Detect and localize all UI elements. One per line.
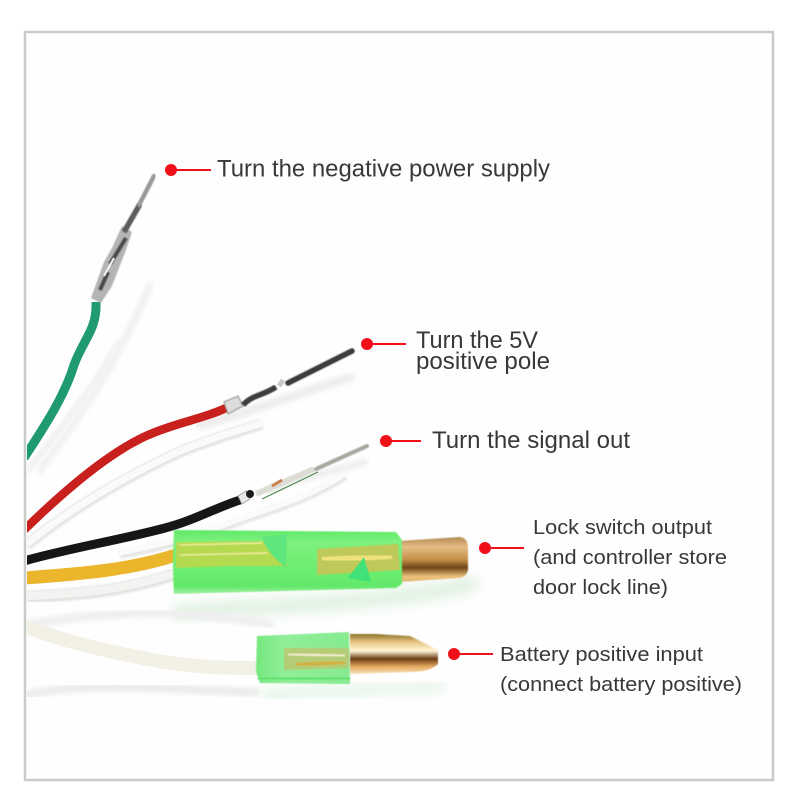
white wires behind (27, 340, 345, 597)
callout: 5V positive pole (361, 327, 550, 375)
soft wire shadows (27, 285, 470, 695)
wire: white power lead (24, 626, 258, 668)
wire: yellow (24, 555, 176, 578)
callout: lock switch output: Lock switch output (533, 516, 712, 539)
wire: black with pin terminal (24, 446, 367, 561)
callout: signal out: Turn the signal out (432, 427, 630, 454)
callout: battery positive input: (connect battery positive) (500, 673, 742, 696)
connector: large green sleeve with gold barrel (173, 530, 468, 594)
callout: lock switch output: (and controller store (533, 546, 727, 569)
callout: battery positive input (448, 643, 742, 696)
callout: battery positive input: Battery positive input (500, 643, 703, 666)
callout: lock switch output (479, 516, 727, 599)
callout: 5V positive pole: Turn the 5V (416, 327, 538, 354)
wire: green with pin terminal (24, 176, 154, 458)
callout: 5V positive pole: positive pole (416, 348, 550, 375)
callout: negative power supply: Turn the negative power supply (217, 156, 550, 182)
connector: small green sleeve with gold bullet (256, 632, 438, 684)
wire: red with pin terminal (24, 351, 352, 530)
callout: lock switch output: door lock line) (533, 576, 668, 599)
